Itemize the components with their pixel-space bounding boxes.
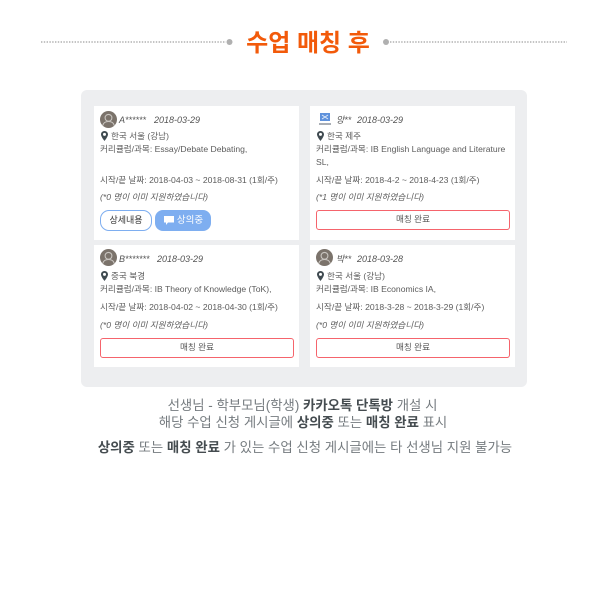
applicants note: (*0 명이 이미 지원하였습니다) [316, 320, 424, 330]
dates: 시작/끝 날짜: 2018-04-02 ~ 2018-04-30 (1회/주) [100, 302, 278, 312]
curriculum: 커리큘럼/과목: IB English Language and Literature [316, 144, 505, 154]
dates: 시작/끝 날짜: 2018-3-28 ~ 2018-3-29 (1회/주) [316, 302, 484, 312]
curriculum: 커리큘럼/과목: IB Theory of Knowledge (ToK), [100, 284, 271, 294]
location: 한국 서울 (강남) [327, 271, 385, 281]
right dotted divider [383, 39, 567, 45]
button: details: 상세내용 [109, 215, 143, 225]
status: matched: 매칭 완료 [396, 214, 430, 224]
card: 앙** [310, 106, 515, 240]
status: matched [100, 338, 294, 358]
avatar [100, 249, 117, 266]
avatar: logo [319, 113, 331, 125]
status: matched [316, 338, 510, 358]
dates: 시작/끝 날짜: 2018-04-03 ~ 2018-08-31 (1회/주) [100, 175, 278, 185]
avatar [100, 111, 117, 128]
card: B*******: 2018-03-29 [157, 254, 203, 264]
curriculum: 커리큘럼/과목: Essay/Debate Debating, [100, 144, 247, 154]
caption line 2: 해당 수업 신청 게시글에 상의중 또는 매칭 완료 표시 [159, 415, 447, 430]
button: in consultation: 상의중 [177, 215, 203, 226]
curriculum: 커리큘럼/과목: IB Economics IA, [316, 284, 436, 294]
caption line 1: 선생님 - 학부모님(학생) 카카오톡 단톡방 개설 시 [168, 398, 437, 413]
avatar [316, 249, 333, 266]
status: matched: 매칭 완료 [396, 342, 430, 352]
caption line 3: 상의중 또는 매칭 완료 가 있는 수업 신청 게시글에는 타 선생님 지원 불가능 [98, 440, 512, 455]
title: 수업 매칭 후 [246, 30, 370, 57]
applicants note: (*1 명이 이미 지원하였습니다) [316, 192, 424, 202]
card: A****** [94, 106, 299, 240]
applicants note: (*0 명이 이미 지원하였습니다) [100, 320, 208, 330]
dates: 시작/끝 날짜: 2018-4-2 ~ 2018-4-23 (1회/주) [316, 175, 480, 185]
card: 박**: 2018-03-28 [357, 254, 403, 264]
location: 한국 제주 [327, 131, 361, 141]
button: details [100, 210, 152, 231]
applicants note: (*0 명이 이미 지원하였습니다) [100, 192, 208, 202]
card: 박** [310, 245, 515, 367]
status: matched: 매칭 완료 [180, 342, 214, 352]
panel: listing background [81, 90, 527, 387]
name and date: 앙** [336, 115, 351, 125]
card: 앙**: 2018-03-29 [357, 115, 403, 125]
card: B******* [94, 245, 299, 367]
location: 한국 서울 (강남) [111, 131, 169, 141]
name and date: B******* [119, 254, 150, 264]
curriculum [316, 144, 505, 167]
curriculum: SL, [316, 157, 329, 167]
name and date: A****** [119, 115, 146, 125]
status: matched [316, 210, 510, 230]
name and date: 박** [336, 254, 351, 264]
left dotted divider [41, 39, 232, 45]
button: in consultation [155, 210, 211, 231]
card: A******: 2018-03-29 [154, 115, 200, 125]
location: 중국 북경 [111, 271, 145, 281]
